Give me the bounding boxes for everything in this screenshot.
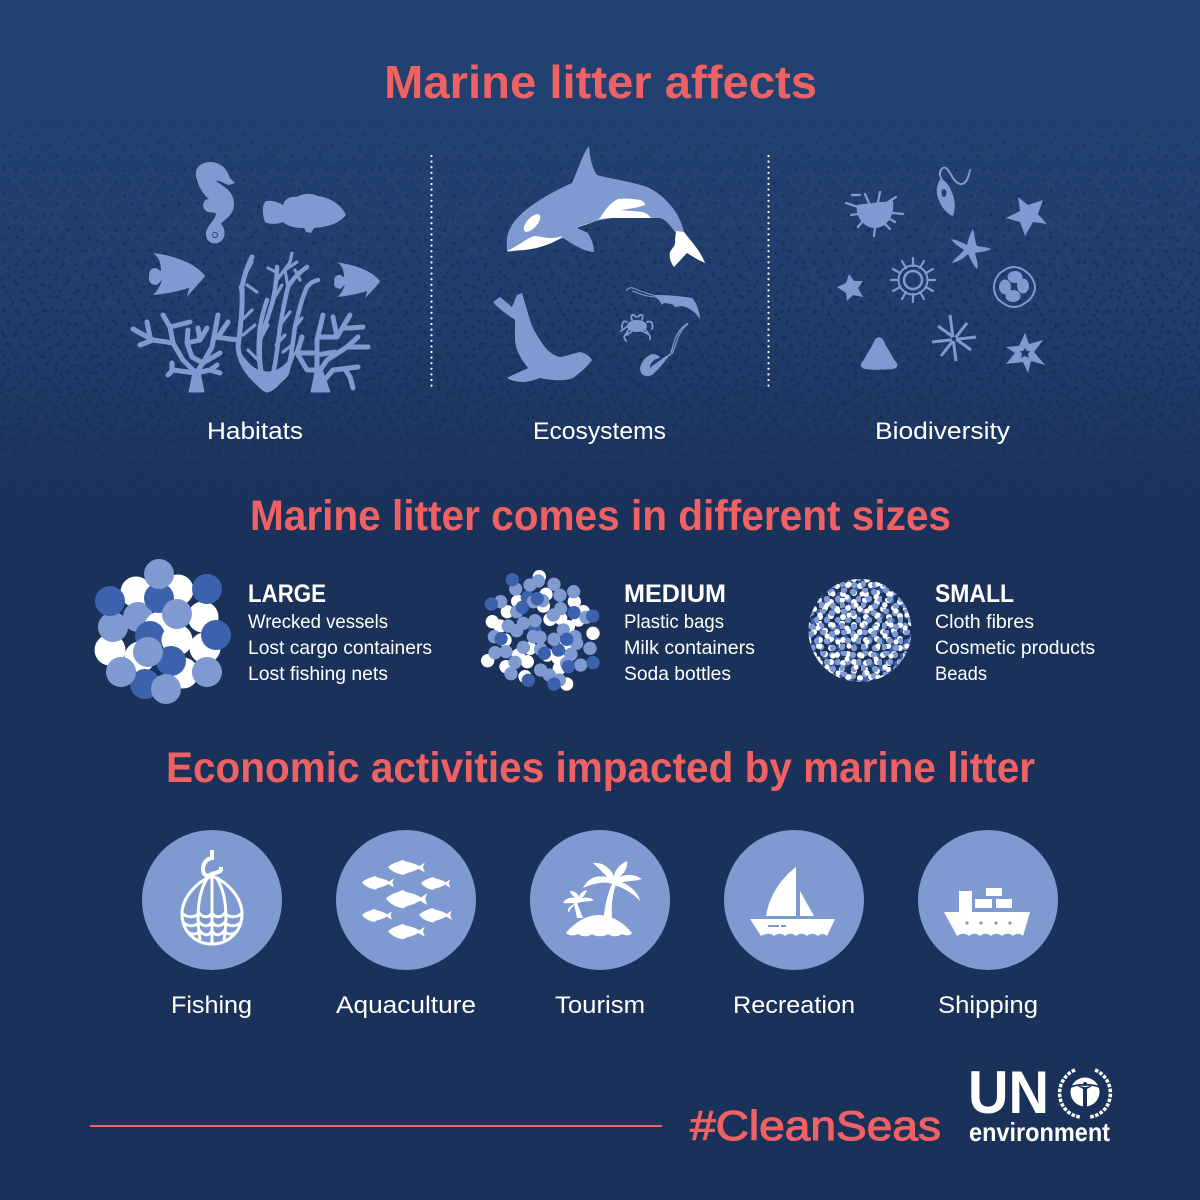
logo: UN environment (968, 1059, 1110, 1147)
heading: different sizes: Marine litter comes in different sizes (250, 492, 951, 540)
icon: centre coral (238, 253, 318, 392)
label: Shipping: Shipping (938, 992, 1038, 1019)
icon: clownfish (263, 194, 346, 233)
icon: emblem (1060, 1070, 1110, 1117)
icon: seahorse (196, 162, 235, 243)
label: Tourism: Tourism (555, 992, 645, 1019)
panel: large litter (94, 559, 432, 704)
text: large: LARGE (248, 580, 326, 608)
icon: crab (621, 315, 652, 341)
divider left (430, 156, 433, 391)
footer rule (90, 1125, 662, 1127)
icon: asterisk plankton (932, 315, 976, 361)
text: large: Lost cargo containers (248, 637, 432, 659)
icon: starfish thin (951, 229, 991, 269)
icon: fishing (142, 830, 282, 970)
panel: habitats illustration (133, 162, 380, 392)
icon: starfish large (1006, 197, 1047, 236)
title: Marine litter affects: Marine litter affects (384, 56, 817, 108)
panel: small litter (808, 579, 1094, 682)
label: Ecosystems: Ecosystems (533, 418, 666, 445)
icon: left coral (133, 315, 238, 392)
panel: ecosystems illustration (493, 146, 705, 382)
background (0, 0, 1200, 428)
label: Habitats: Habitats (207, 418, 303, 445)
text: small: SMALL (935, 580, 1014, 608)
text: small (935, 580, 1095, 685)
icon: starfish dark centre (1006, 333, 1045, 373)
icon: angelfish left (149, 253, 205, 297)
logo: UN environment: environment (969, 1117, 1110, 1147)
icon: tourism (530, 830, 670, 970)
text: medium: Plastic bags (624, 611, 724, 633)
text: large (248, 580, 432, 685)
icon: diatom (994, 267, 1035, 307)
icon: orca (507, 146, 705, 267)
heading: economic activities: Economic activities impacted by marine litter (166, 744, 1035, 792)
text: medium: MEDIUM (624, 580, 726, 608)
icon: angelfish right (334, 262, 380, 299)
panel: medium litter (481, 570, 755, 691)
text: medium (624, 580, 755, 685)
icon: shrimp top (626, 288, 700, 319)
icon: small star (837, 274, 863, 301)
text: large: Lost fishing nets (248, 663, 388, 685)
text: medium: Soda bottles (624, 663, 731, 685)
chart: large circles (94, 559, 231, 704)
label: Biodiversity: Biodiversity (875, 418, 1010, 445)
icon: right coral (297, 315, 368, 392)
text: small: Cosmetic products (935, 637, 1095, 659)
logo: UN environment: UN (968, 1059, 1049, 1126)
icon: recreation (724, 830, 864, 970)
icon: shrimp bottom (640, 323, 688, 376)
text: large: Wrecked vessels (248, 611, 388, 633)
icon: spiky radiolarian (846, 192, 903, 236)
hashtag: CleanSeas: #CleanSeas (690, 1102, 941, 1149)
icon: aquaculture (336, 830, 476, 970)
divider right (767, 156, 770, 391)
icon: seal (493, 293, 592, 382)
chart: medium circles (481, 570, 600, 691)
icon: shipping (918, 830, 1058, 970)
chart: small circles (808, 579, 912, 682)
text: small: Beads (935, 663, 987, 685)
text: medium: Milk containers (624, 637, 755, 659)
text: small: Cloth fibres (935, 611, 1034, 633)
icon: flagellate (937, 168, 970, 216)
label: Aquaculture: Aquaculture (336, 992, 476, 1019)
label: Fishing: Fishing (171, 992, 252, 1019)
label: Recreation: Recreation (733, 992, 855, 1019)
panel: biodiversity illustration (837, 168, 1047, 373)
icon: triangle plankton (861, 337, 897, 370)
icon: sun radiolarian (891, 258, 935, 302)
